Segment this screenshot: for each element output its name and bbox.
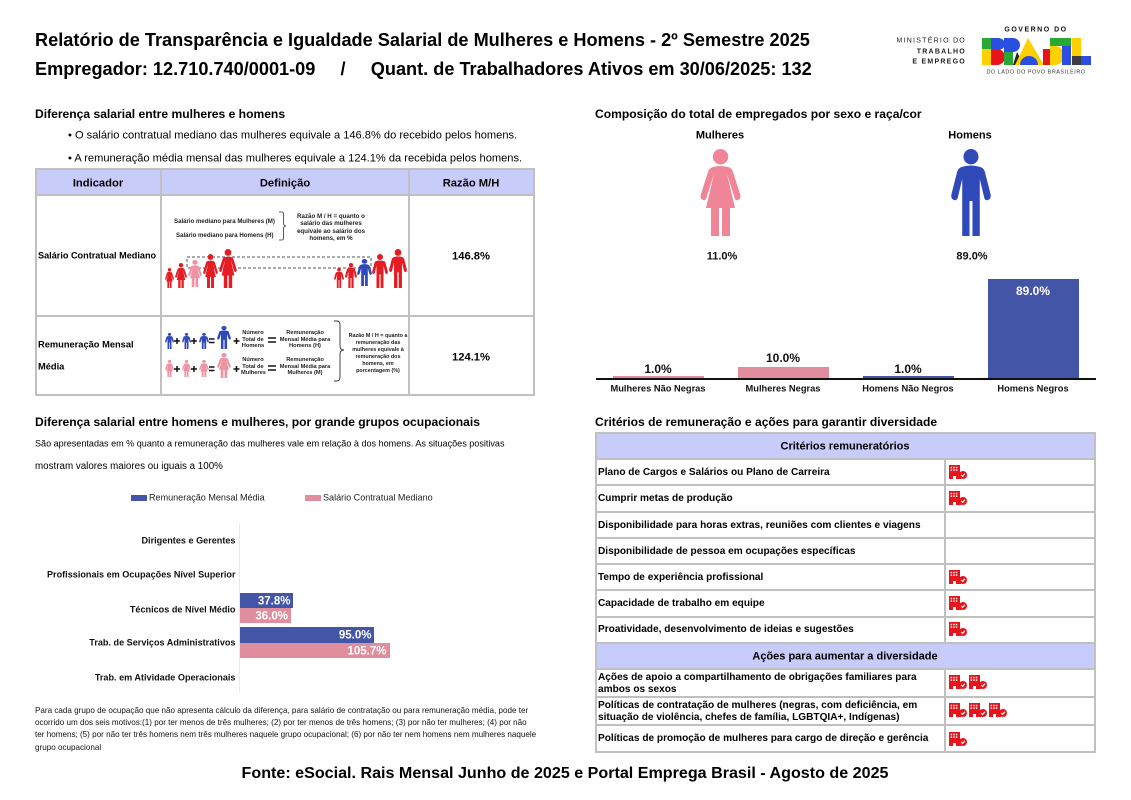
column chart: sexo e raça: 89.0% — [1016, 284, 1050, 298]
table: indicadores: Salário Contratual Mediano — [38, 250, 156, 260]
bar chart: grupos ocupacionais: Técnicos de Nível Médio — [130, 604, 236, 614]
text: remuneração média: • A remuneração média mensal das mulheres equivale a 124.1% da recebida pelos homens. — [68, 152, 522, 164]
diagram: remuneração média: Número Total de Mulheres — [241, 357, 266, 376]
text: nota de rodapé — [35, 706, 536, 752]
text: nota de rodapé: grupo ocupacional — [35, 743, 101, 752]
diagram: remuneração média: Número Total de Homens — [242, 330, 264, 349]
legend: Remuneração Mensal Média — [149, 492, 265, 502]
column chart: sexo e raça: Homens Não Negros — [862, 383, 954, 393]
legend: Salário Contratual Mediano — [323, 492, 433, 502]
pictogram: homens: Homens — [948, 130, 992, 142]
text: nota de rodapé: Para cada grupo de ocupação que não apresenta cálculo da diferença, para salário de contratação ou para remuneração média, pode ter — [35, 706, 528, 715]
logo: ministério do trabalho e emprego: E EMPREGO — [912, 58, 966, 66]
column chart: sexo e raça: 10.0% — [766, 350, 800, 364]
heading: diferença salarial: Diferença salarial entre mulheres e homens — [35, 107, 285, 121]
table: indicadores: Média — [38, 361, 64, 371]
pictogram: mulheres: Mulheres — [696, 130, 744, 142]
bar chart: grupos ocupacionais: 36.0% — [255, 610, 288, 622]
heading: critérios: Critérios de remuneração e ações para garantir diversidade — [595, 415, 937, 429]
text: explicação: mostram valores maiores ou iguais a 100% — [35, 461, 223, 472]
diagram: remuneração média — [165, 320, 408, 382]
table: critérios de remuneração: Disponibilidade para horas extras, reuniões com clientes e viagens — [598, 520, 921, 531]
bar chart: grupos ocupacionais: Profissionais em Ocupações Nível Superior — [47, 569, 236, 579]
logo: ministério do trabalho e emprego — [896, 36, 966, 66]
table: critérios de remuneração: Ações de apoio a compartilhamento de obrigações familiares para — [598, 672, 917, 683]
logo: ministério do trabalho e emprego: TRABALHO — [917, 48, 966, 55]
text: explicação — [35, 438, 505, 472]
pictogram: mulheres — [696, 130, 744, 262]
logo: ministério do trabalho e emprego: MINISTÉRIO DO — [896, 38, 966, 44]
table: critérios de remuneração: Disponibilidade de pessoa em ocupações específicas — [598, 546, 855, 557]
pictogram: homens: 89.0% — [956, 250, 988, 262]
diagram: salário mediano: Salário mediano para Mulheres (M) — [174, 218, 275, 225]
pictogram: mulheres: 11.0% — [707, 250, 737, 262]
diagram: salário mediano: Razão M / H = quanto o salário das mulheres equivale ao salário dos homens, em % — [297, 213, 365, 242]
footer: fonte: Fonte: eSocial. Rais Mensal Junho de 2025 e Portal Emprega Brasil - Agosto de 2025 — [242, 764, 888, 782]
table: critérios de remuneração: Capacidade de trabalho em equipe — [598, 598, 765, 609]
text: salário contratual: • O salário contratual mediano das mulheres equivale a 146.8% do recebido pelos homens. — [68, 129, 517, 141]
table: critérios de remuneração: Políticas de promoção de mulheres para cargo de direção e gerência — [598, 733, 928, 744]
table: critérios de remuneração: Cumprir metas de produção — [598, 493, 733, 504]
table: indicadores: Definição — [260, 177, 310, 189]
table: critérios de remuneração: Plano de Cargos e Salários ou Plano de Carreira — [598, 467, 830, 478]
heading: composição: Composição do total de empregados por sexo e raça/cor — [595, 107, 922, 121]
diagram: remuneração média: Remuneração Mensal Média para Mulheres (M) — [280, 357, 330, 376]
table: critérios de remuneração: situação de violência, chefes de família, LGBTQIA+, Indígenas) — [598, 712, 900, 723]
bar chart: grupos ocupacionais: 105.7% — [347, 645, 386, 657]
diagram: salário mediano: Salário mediano para Homens (H) — [176, 232, 274, 239]
table: critérios de remuneração: Proatividade, desenvolvimento de ideias e sugestões — [598, 624, 854, 635]
logo: governo do brasil: GOVERNO DO — [1004, 26, 1068, 34]
title: Relatório de Transparência e Igualdade Salarial de Mulheres e Homens - 2º Semestre 2025 — [35, 30, 810, 50]
bar chart: grupos ocupacionais: Trab. em Atividade Operacionais — [95, 672, 236, 682]
column chart: sexo e raça — [596, 279, 1096, 394]
table: indicadores: Razão M/H — [443, 177, 499, 189]
bar chart: grupos ocupacionais: Trab. de Serviços Administrativos — [89, 637, 236, 647]
table: indicadores: Remuneração Mensal — [38, 339, 134, 349]
table: critérios de remuneração: Critérios remuneratórios — [781, 440, 909, 452]
table: indicadores: 146.8% — [452, 250, 490, 262]
bar chart: grupos ocupacionais: Dirigentes e Gerentes — [141, 535, 236, 545]
table: critérios de remuneração: Políticas de contratação de mulheres (negras, com deficiência, em — [598, 700, 917, 711]
table: indicadores — [35, 168, 535, 396]
bar chart: grupos ocupacionais — [47, 524, 390, 692]
column chart: sexo e raça: Homens Negros — [997, 383, 1069, 393]
table: critérios de remuneração: ambos os sexos — [598, 684, 677, 695]
column chart: sexo e raça: Mulheres Não Negras — [610, 383, 706, 393]
logo: governo do brasil — [982, 26, 1091, 75]
diagram: salário mediano — [165, 212, 407, 288]
logo: governo do brasil: DO LADO DO POVO BRASILEIRO — [986, 69, 1086, 75]
diagram: remuneração média: Razão M / H = quanto a remuneração das mulheres equivale à remuneração dos homens, em porcentagem (%) — [349, 333, 407, 374]
table: critérios de remuneração — [595, 432, 1096, 753]
legend — [131, 492, 433, 502]
diagram: remuneração média: Remuneração Mensal Média para Homens (H) — [280, 330, 330, 349]
title — [35, 30, 812, 79]
bar chart: grupos ocupacionais: 37.8% — [258, 595, 290, 607]
table: indicadores: Indicador — [73, 177, 123, 189]
table: indicadores: 124.1% — [452, 351, 490, 363]
text: explicação: São apresentadas em % quanto a remuneração das mulheres vale em relação à dos homens. As situações positivas — [35, 438, 505, 448]
bar chart: grupos ocupacionais: 95.0% — [339, 629, 372, 641]
text: nota de rodapé: ter homens; (5) por não ter três homens nem três mulheres naquele grupo ocupacional; (6) por não ter nem homens nem mulheres naquele — [35, 730, 536, 739]
text: nota de rodapé: ocorrido um dos seis motivos:(1) por ter menos de três mulheres; (2) por ter menos de três homens; (3) por não ter mulheres; (4) por não — [35, 718, 527, 727]
column chart: sexo e raça: 1.0% — [894, 362, 922, 376]
table: critérios de remuneração: Ações para aumentar a diversidade — [752, 650, 938, 662]
column chart: sexo e raça: Mulheres Negras — [746, 383, 820, 393]
title: Empregador: 12.710.740/0001-09 / Quant. de Trabalhadores Ativos em 30/06/2025: 132 — [35, 58, 812, 78]
table: critérios de remuneração: Tempo de experiência profissional — [598, 572, 763, 583]
heading: grupos ocupacionais: Diferença salarial entre homens e mulheres, por grande grupos ocupacionais — [35, 415, 480, 429]
column chart: sexo e raça: 1.0% — [644, 362, 672, 376]
pictogram: homens — [948, 130, 992, 262]
